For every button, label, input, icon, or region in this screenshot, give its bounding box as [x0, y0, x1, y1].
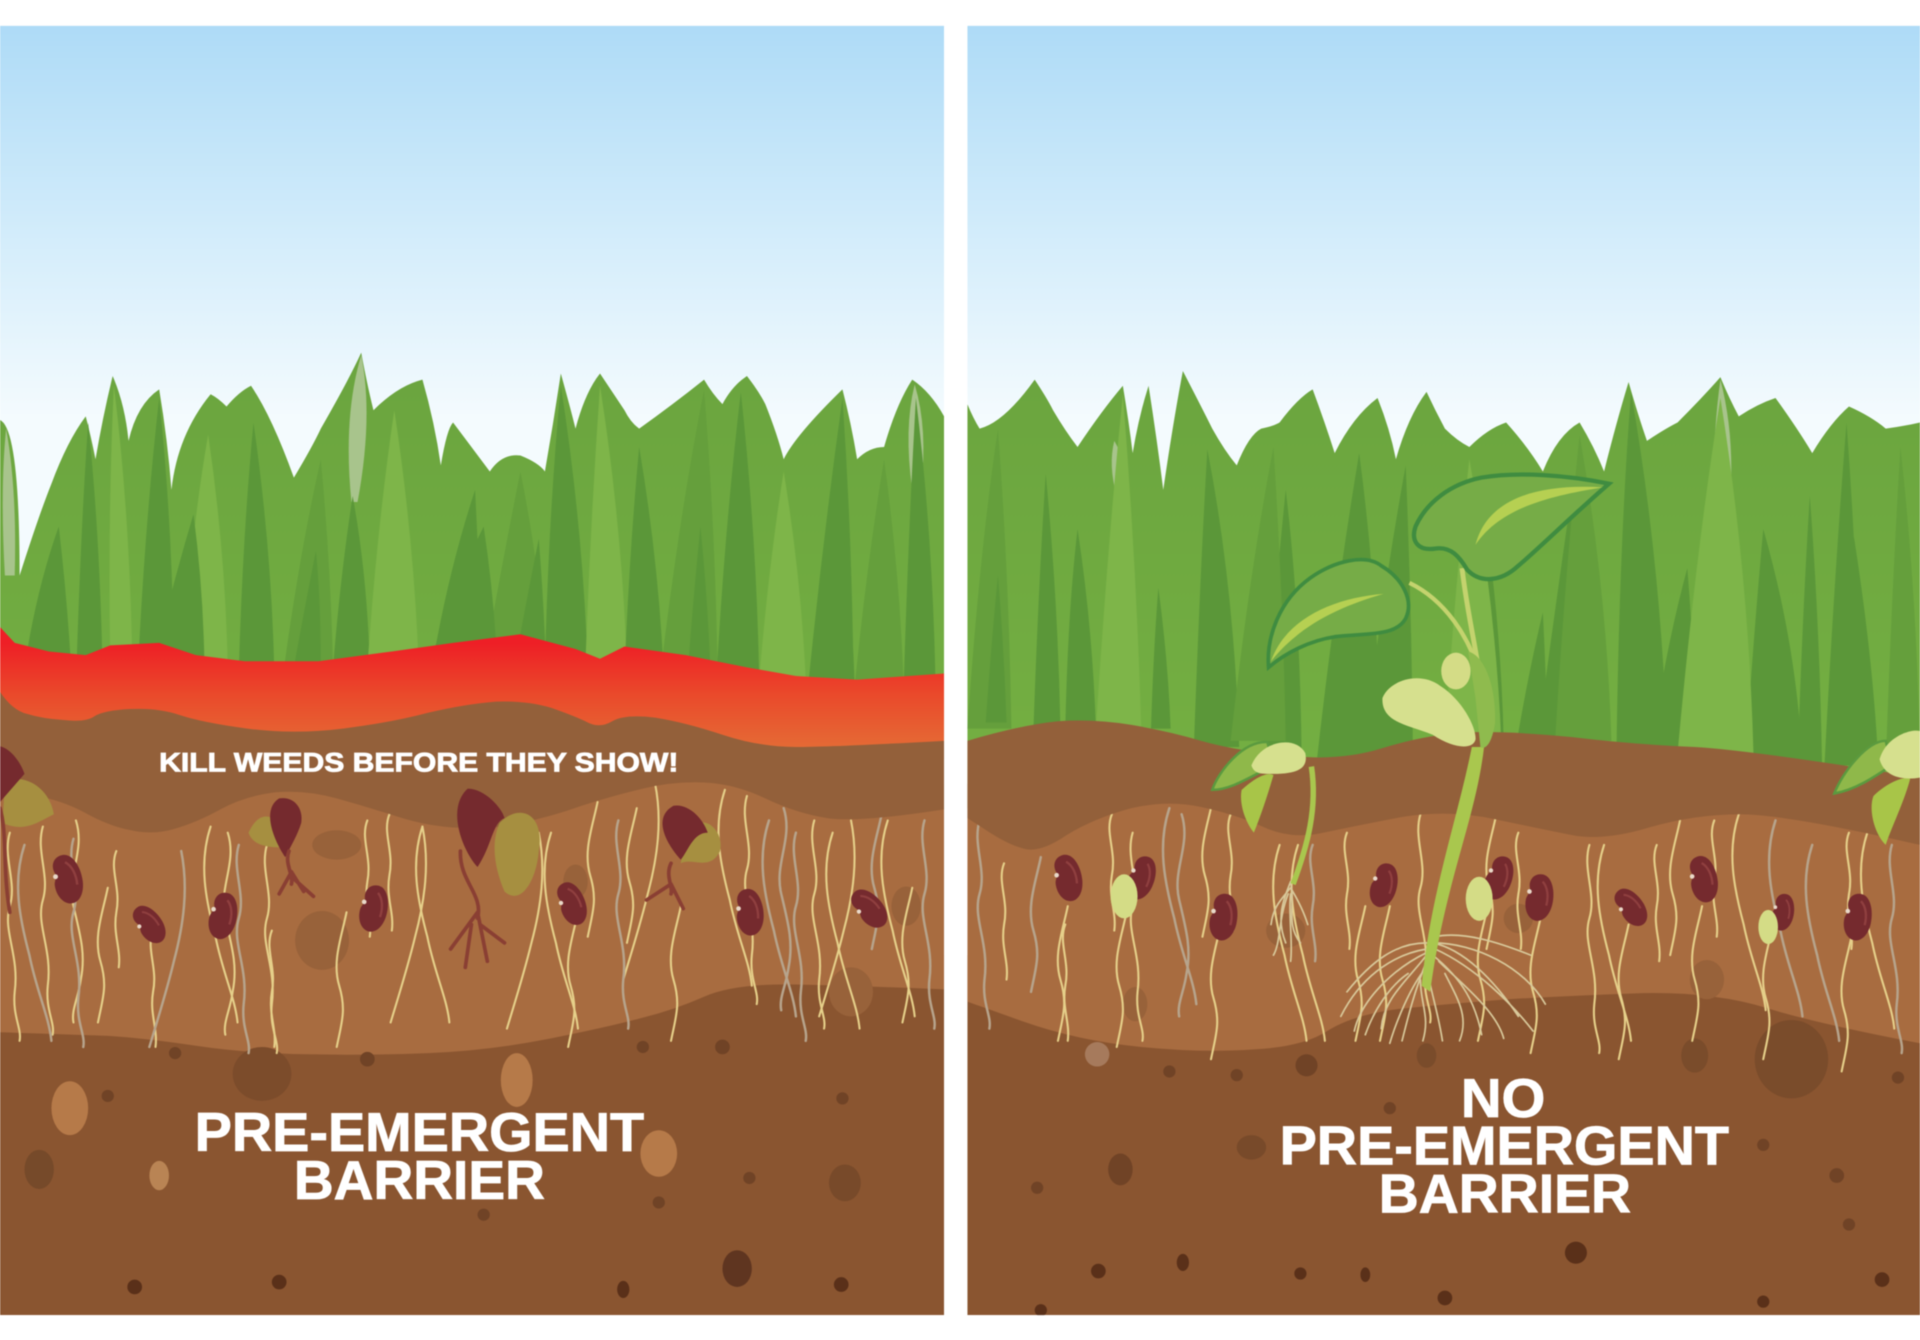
heading: pre-emergent barrier: PRE-EMERGENT	[195, 1101, 644, 1163]
heading: no pre-emergent barrier: BARRIER	[1379, 1162, 1631, 1224]
large seedling	[1268, 475, 1609, 1043]
sky background	[0, 25, 944, 572]
stones and pebbles	[1031, 1020, 1904, 1316]
panel: no pre-emergent barrier	[967, 26, 1920, 1316]
germinating seeds	[1111, 853, 1797, 944]
bottom soil	[967, 955, 1920, 1315]
bottom soil	[0, 955, 944, 1315]
callout: kill weeds: KILL WEEDS BEFORE THEY SHOW!	[159, 747, 678, 777]
heading: no pre-emergent barrier: PRE-EMERGENT	[1280, 1115, 1729, 1177]
dying seedling 2	[249, 798, 313, 896]
upper soil band	[967, 721, 1920, 850]
grass roots	[8, 784, 935, 1053]
seedling at right edge	[1834, 731, 1920, 845]
heading: no pre-emergent barrier	[1282, 1078, 1730, 1214]
heading: no pre-emergent barrier: NO	[1461, 1067, 1545, 1129]
small seedling	[1212, 742, 1313, 961]
sky background	[966, 25, 1920, 486]
heading: pre-emergent barrier	[197, 1112, 645, 1200]
lower leaf	[1268, 560, 1408, 667]
middle soil layer	[0, 759, 944, 1055]
grass roots	[977, 802, 1902, 1071]
dying seedling 4	[647, 805, 721, 909]
dormant weed seeds	[49, 852, 894, 948]
grass background	[967, 371, 1920, 808]
weed seeds	[1051, 852, 1875, 942]
dying seedling 3	[451, 789, 540, 967]
middle soil layer	[967, 784, 1920, 1051]
grass blades	[967, 380, 1920, 765]
heading: pre-emergent barrier: BARRIER	[294, 1149, 545, 1211]
upper leaf	[1414, 475, 1609, 579]
soil patches	[1123, 904, 1724, 1021]
soil patches	[295, 830, 921, 1016]
dying seedling 1	[0, 746, 54, 912]
soil top shade	[0, 692, 944, 832]
panel: with pre-emergent barrier	[0, 26, 944, 1315]
stones and pebbles	[24, 1040, 861, 1298]
grass background	[0, 352, 945, 680]
grass blades	[3, 355, 936, 686]
red pre-emergent barrier layer	[0, 627, 944, 759]
